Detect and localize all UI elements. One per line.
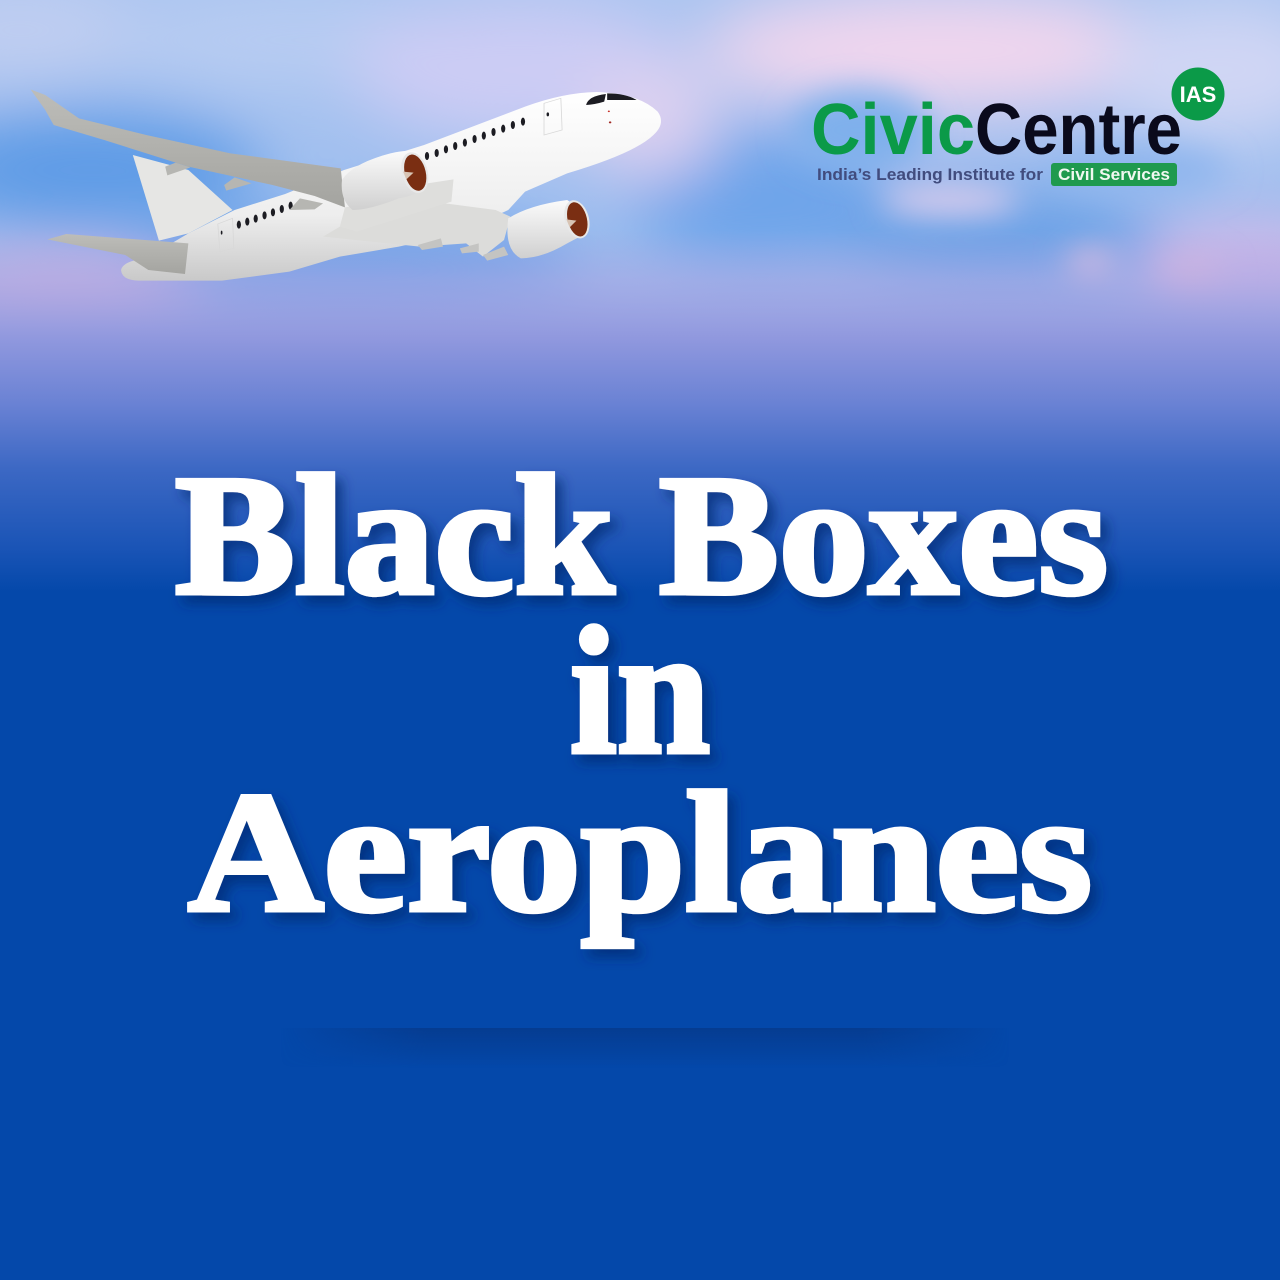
logo tagline: India’s Leading Institute for xyxy=(817,165,1043,184)
fuselage xyxy=(121,92,661,281)
nose markers xyxy=(608,110,611,123)
doors xyxy=(218,98,562,252)
far engine xyxy=(507,199,593,258)
logo wordmark: Civic xyxy=(811,90,975,170)
front cabin windows xyxy=(221,112,549,235)
cockpit windows xyxy=(586,93,637,105)
background: cloudy sky xyxy=(0,0,1280,592)
logo badge: IAS xyxy=(1172,68,1224,120)
aeroplane xyxy=(31,89,661,281)
shadow band below title xyxy=(326,1028,964,1056)
near engine xyxy=(340,151,454,232)
horizontal stabilizer xyxy=(47,234,188,274)
title line 2: in xyxy=(570,591,710,792)
logo tag: Civil Services: Civil Services xyxy=(1058,165,1170,184)
underbelly wing root xyxy=(323,203,510,257)
logo wordmark xyxy=(811,90,1182,170)
main wing xyxy=(31,89,345,207)
flap fairings xyxy=(418,238,508,261)
logo wordmark: Centre xyxy=(975,90,1182,170)
title line 1: Black Boxes xyxy=(175,441,1108,631)
logo: Civic Centre IAS xyxy=(811,68,1224,186)
title xyxy=(175,441,1108,948)
tail fin xyxy=(133,155,233,241)
logo badge: IAS: IAS xyxy=(1180,82,1216,107)
title line 3: Aeroplanes xyxy=(188,758,1092,948)
wing fairings xyxy=(165,163,323,210)
rear cabin windows xyxy=(237,202,293,229)
